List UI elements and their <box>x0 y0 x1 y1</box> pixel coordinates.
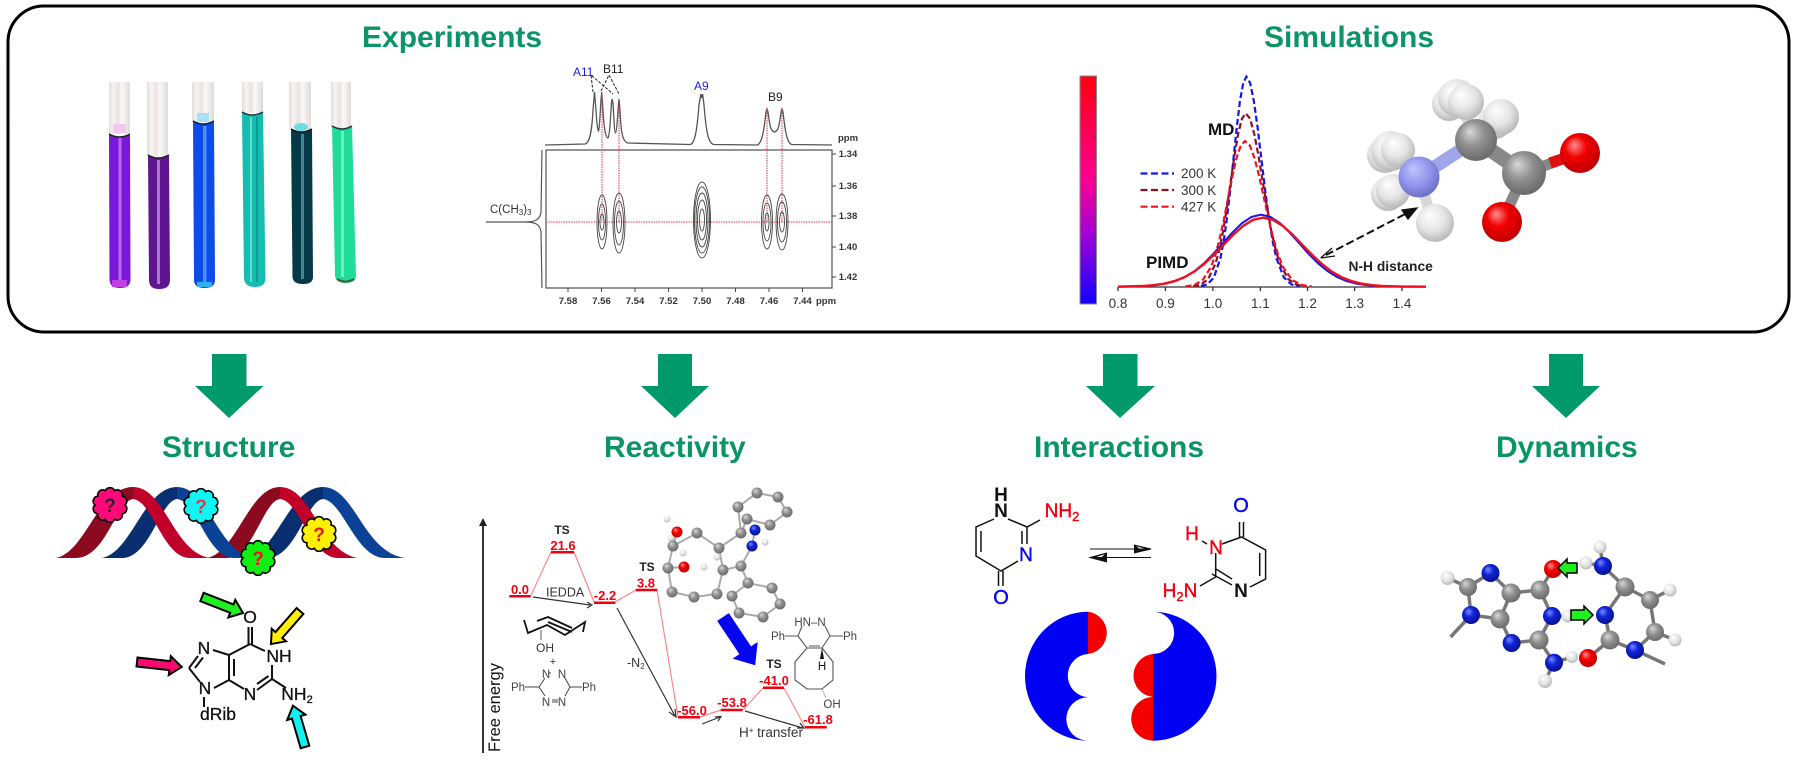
x axis labels: 1.4 <box>1393 296 1412 311</box>
transition state ball and stick model <box>662 488 792 622</box>
x axis labels: 7.44 <box>793 296 812 307</box>
molecule: guanine structure with arrows <box>136 588 314 750</box>
x axis labels: 0.9 <box>1156 296 1175 311</box>
green arrow to nitrogen <box>1571 606 1593 624</box>
C(CH3)3 label: 3 <box>519 208 524 217</box>
x axis labels: 7.58 <box>559 296 577 307</box>
molecule: isocytosine tautomer 1 <box>976 485 1079 609</box>
peak assignment dashes <box>591 75 619 94</box>
peak labels: A9 <box>694 79 709 93</box>
energy values: -41.0 <box>759 673 789 688</box>
pathway text: 2 <box>640 662 645 671</box>
red lobes <box>1131 654 1153 741</box>
atom labels: N <box>1184 581 1197 602</box>
energy values <box>511 538 833 727</box>
atom labels: O <box>1233 495 1249 517</box>
guanine atom labels: N <box>244 684 256 704</box>
tetrazine structure: N <box>542 669 550 681</box>
product structure <box>771 617 857 711</box>
y axis labels <box>838 133 858 283</box>
cyclooctenol structure: OH <box>536 641 554 655</box>
tetrazine structure: N <box>558 697 566 709</box>
bonds <box>1390 98 1580 223</box>
guanine atom labels: N <box>199 678 211 698</box>
MD curve 300 K <box>1193 113 1305 286</box>
blue body <box>1153 612 1216 741</box>
hydrogen clusters <box>1367 79 1519 242</box>
energy values: 0.0 <box>511 582 529 597</box>
product structure: OH <box>823 699 841 711</box>
tetrazine structure: Ph <box>582 682 596 694</box>
blue body <box>1025 612 1088 741</box>
y axis labels: 1.34 <box>839 149 858 160</box>
atom labels: O <box>993 587 1009 609</box>
atom labels: H <box>1163 581 1176 602</box>
pathway text: transfer <box>753 725 803 740</box>
green lesion cloud <box>241 541 275 575</box>
chart: 2D NMR spectrum <box>486 62 858 307</box>
atom labels: H <box>1185 524 1199 545</box>
pathway text: + <box>749 726 754 735</box>
energy values: 21.6 <box>550 538 576 553</box>
atom labels: N <box>1019 545 1033 566</box>
heading: Simulations: Simulations <box>1264 21 1434 54</box>
y axis labels: 1.40 <box>839 242 857 253</box>
green arrow to oxygen <box>1558 559 1577 577</box>
test tube 6 green <box>331 82 356 283</box>
photo: six coloured test tubes <box>109 82 356 289</box>
cyan lesion cloud: ? <box>195 497 207 518</box>
pink lesion cloud: ? <box>104 496 116 517</box>
pathway text <box>546 586 803 740</box>
molecule: ball and stick amino acid <box>1367 79 1600 242</box>
energy values: 3.8 <box>637 576 655 590</box>
red profile connectors <box>531 552 805 727</box>
tetrazine structure: Ph <box>511 682 525 694</box>
yellow lesion cloud: ? <box>313 525 325 546</box>
atom labels: 2 <box>1176 589 1184 604</box>
atom labels: 2 <box>1072 509 1079 524</box>
x axis labels: 1.2 <box>1298 296 1317 311</box>
peak labels: A11 <box>573 65 594 79</box>
MD curve 427 K <box>1186 141 1312 286</box>
energy values: -56.0 <box>677 703 707 718</box>
heading: Reactivity: Reactivity <box>604 431 746 464</box>
molecule: isocytosine tautomer 2 <box>1163 495 1266 604</box>
nitrogen atom <box>1398 156 1440 198</box>
C(CH3)3 label: 3 <box>527 208 532 217</box>
x axis labels: 7.46 <box>760 296 778 307</box>
pathway text: H <box>739 725 749 740</box>
black peak labels: B9 <box>768 90 783 104</box>
y axis labels: 1.36 <box>839 181 857 192</box>
atom labels: N <box>994 501 1008 522</box>
panel: experiments and simulations frame <box>8 6 1789 332</box>
guanine atom labels: NH <box>281 684 307 704</box>
pink arrow <box>136 653 183 676</box>
guanine atom labels: dRib <box>200 704 236 724</box>
guanine bonds <box>189 627 286 707</box>
legend: 427 K <box>1181 200 1216 214</box>
yellow lesion cloud <box>302 517 336 551</box>
colour bar <box>1080 76 1096 304</box>
tetrazine structure: N <box>542 697 550 709</box>
oxygen atoms <box>1482 133 1600 242</box>
bonds <box>976 519 1040 586</box>
C(CH3)3 label: ) <box>523 204 527 216</box>
product structure: HN–N <box>794 617 826 629</box>
red guide lines <box>546 94 832 222</box>
x axis labels: ppm <box>816 296 836 307</box>
product structure: H <box>818 661 826 673</box>
molecule: base pair ball and stick model <box>1441 540 1682 688</box>
plot frame <box>546 150 832 288</box>
TS labels: TS <box>766 657 782 671</box>
heading: Experiments: Experiments <box>362 21 542 54</box>
x axis labels: 1.1 <box>1251 296 1270 311</box>
x axis labels: 7.50 <box>693 296 711 307</box>
tetrazine structure <box>511 669 596 709</box>
arrow down to Reactivity <box>641 354 709 418</box>
heading: Dynamics: Dynamics <box>1496 431 1638 464</box>
peak labels <box>573 65 709 93</box>
black peak labels: B11 <box>603 62 624 76</box>
TS labels: TS <box>554 523 570 537</box>
chart: free energy reaction profile <box>479 488 857 753</box>
carbon atoms <box>1459 578 1664 650</box>
MD curve 200 K <box>1201 77 1299 286</box>
y axis labels: ppm <box>838 133 858 144</box>
PIMD label: PIMD <box>1146 253 1188 272</box>
guanine atom labels: 2 <box>307 694 313 706</box>
atom labels: N <box>1234 581 1248 602</box>
guanine atom labels: N <box>198 638 210 658</box>
diagram: right complementary shape <box>1131 612 1216 741</box>
energy values: -53.8 <box>717 695 747 710</box>
red cap <box>1088 612 1107 654</box>
x axis labels <box>559 296 836 307</box>
black pathway arrows <box>533 597 804 728</box>
product structure: Ph <box>771 631 785 643</box>
cyclooctenol structure <box>524 617 585 668</box>
helix ribbons <box>56 487 405 558</box>
atom labels: H <box>994 485 1008 506</box>
test tube 2 violet <box>147 82 170 289</box>
bonds <box>1448 547 1675 681</box>
energy values: -2.2 <box>594 588 616 603</box>
legend: 300 K <box>1181 183 1216 198</box>
cyclooctenol structure: + <box>550 656 556 668</box>
carbon atoms <box>1455 119 1546 195</box>
guanine atom labels <box>198 607 313 724</box>
free energy axis <box>479 518 487 753</box>
test tube 4 teal <box>242 82 266 287</box>
x axis labels: 7.54 <box>626 296 645 307</box>
pink lesion cloud <box>93 488 127 522</box>
contour peaks <box>597 182 788 258</box>
cyan lesion cloud <box>184 489 218 523</box>
x axis labels: 7.48 <box>726 296 745 307</box>
heading: Interactions: Interactions <box>1034 431 1204 464</box>
heading: Structure: Structure <box>162 431 295 464</box>
oxygen atoms <box>1544 560 1597 667</box>
x axis labels: 0.8 <box>1109 296 1127 311</box>
energy values: -61.8 <box>803 712 833 727</box>
PIMD red curve <box>1118 218 1426 287</box>
green arrow <box>199 588 246 622</box>
product structure: Ph <box>843 631 857 643</box>
x axis labels: 1.0 <box>1204 296 1222 311</box>
x axis tick marks <box>568 154 836 292</box>
yellow arrow <box>264 605 307 650</box>
hydrogen atoms <box>1441 540 1682 688</box>
x axis <box>1118 287 1426 291</box>
bonds <box>1200 522 1266 587</box>
equilibrium arrows <box>1090 545 1151 562</box>
atom labels: NH <box>1045 501 1072 522</box>
x axis labels: 7.52 <box>659 296 678 307</box>
arrow down to Structure <box>195 354 264 418</box>
x axis labels <box>1109 296 1412 311</box>
PIMD blue curve <box>1147 215 1375 286</box>
pathway text: -N <box>627 656 640 670</box>
1D proton trace <box>545 92 832 145</box>
tetrazine structure: N <box>558 669 566 681</box>
x axis labels: 1.3 <box>1345 296 1364 311</box>
TS labels <box>554 523 782 671</box>
chart: N-H distance distribution <box>1080 76 1433 311</box>
test tube 3 blue <box>192 82 215 288</box>
green lesion cloud: ? <box>252 549 264 570</box>
arrow down to Interactions <box>1086 354 1155 418</box>
TS labels: TS <box>639 560 655 574</box>
x axis labels: 7.56 <box>592 296 611 307</box>
C(CH3)3 label: C(CH <box>490 204 519 216</box>
atom labels <box>1163 495 1249 604</box>
atom labels: N <box>1209 538 1223 559</box>
blue arrow <box>711 609 768 674</box>
guanine atom labels: O <box>243 607 257 627</box>
illustration: DNA double helix with unknown lesions <box>56 487 405 575</box>
black peak labels <box>603 62 783 104</box>
nitrogen atoms <box>1462 557 1644 672</box>
pathway text: IEDDA <box>546 586 585 600</box>
legend <box>1140 166 1216 214</box>
diagram: left complementary shape <box>1025 612 1107 741</box>
dashed double arrow <box>1321 208 1417 258</box>
guanine atom labels: NH <box>266 646 292 666</box>
arrow down to Dynamics <box>1532 354 1600 418</box>
y axis labels: 1.42 <box>839 272 857 283</box>
N-H distance label: N-H distance <box>1348 259 1433 274</box>
legend: 200 K <box>1181 166 1216 181</box>
free energy label: Free energy <box>486 662 504 752</box>
vertical trace <box>486 150 542 288</box>
y axis labels: 1.38 <box>839 211 857 222</box>
cyan arrow <box>284 703 314 750</box>
test tube 5 dark teal <box>289 82 313 284</box>
MD label: MD <box>1208 120 1234 139</box>
energy levels <box>509 552 827 727</box>
test tube 1 purple <box>109 82 130 288</box>
atom labels <box>993 485 1079 609</box>
